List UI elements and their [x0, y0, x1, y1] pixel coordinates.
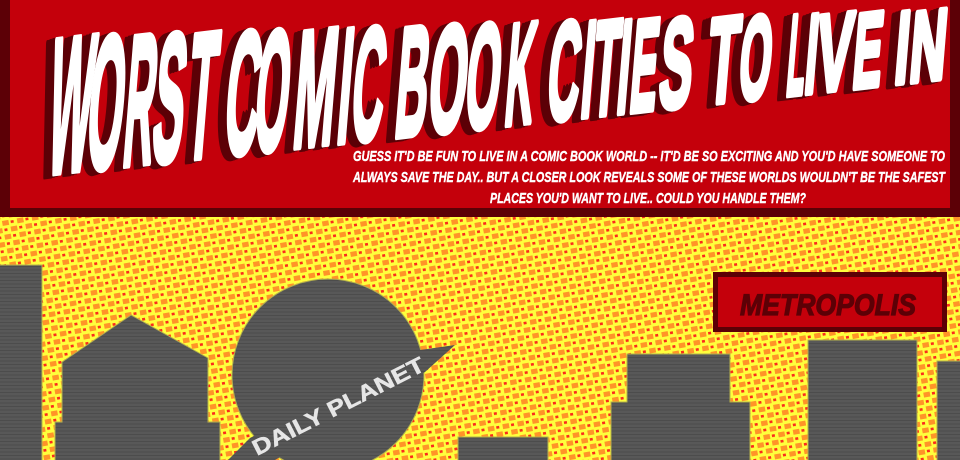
title: S — [147, 0, 194, 203]
title: C — [219, 0, 269, 193]
planet ring — [228, 345, 455, 460]
building: low block — [458, 437, 548, 460]
building: right edge block — [937, 361, 960, 460]
header banner — [0, 0, 960, 217]
building: left tower — [0, 265, 42, 460]
building: tall block — [808, 340, 917, 460]
halftone background — [0, 215, 960, 460]
title: O — [81, 0, 134, 211]
building: pitched roof — [55, 315, 220, 460]
building: stepped tower — [611, 354, 750, 460]
planet globe — [232, 279, 424, 460]
Daily Planet building — [228, 279, 455, 460]
Daily Planet sign text: DAILY PLANET — [248, 352, 429, 460]
Metropolis label — [716, 274, 944, 330]
Metropolis label: METROPOLIS — [740, 289, 916, 322]
title — [42, 0, 952, 215]
intro text: PLACES YOU'D WANT TO LIVE.. COULD YOU HANDLE THEM? — [490, 190, 806, 207]
intro text — [352, 148, 946, 207]
